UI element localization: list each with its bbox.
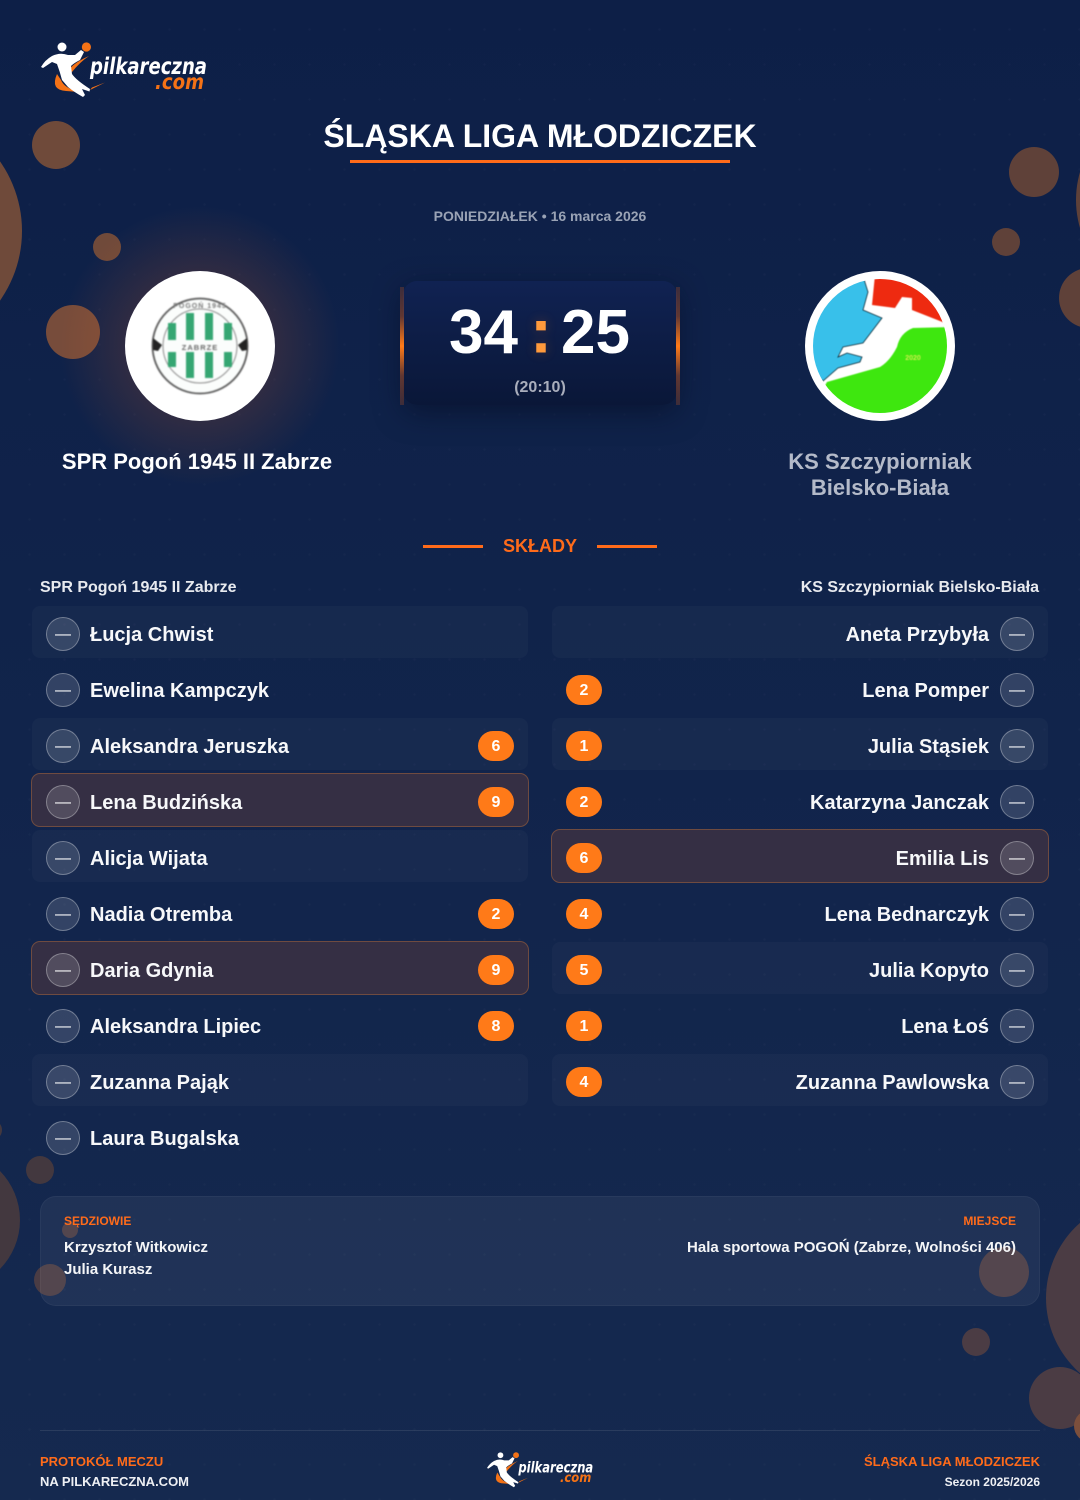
protocol source: NA PILKARECZNA.COM [40,1474,189,1489]
player row: — [1009,626,1025,643]
player row: — [55,1130,71,1147]
match date: PONIEDZIAŁEK • 16 marca 2026 [434,208,646,224]
player row: Aleksandra Lipiec [90,1016,261,1038]
player row: — [1009,738,1025,755]
logo: pilkareczna.com footer [487,1452,593,1488]
season: Sezon 2025/2026 [945,1475,1040,1489]
score colon: : [531,298,551,365]
panel: home squad [31,617,529,1155]
team name: home: SPR Pogoń 1945 II Zabrze [62,449,332,474]
team crest: SPR Pogoń [125,271,275,421]
player row: Łucja Chwist [90,624,213,646]
player row: — [55,682,71,699]
team crest: SPR Pogoń: POGOŃ 1945 [173,301,227,310]
player row [566,897,1034,931]
logo: pilkareczna.com footer: pilkareczna [518,1459,593,1476]
player row: 5 [580,962,588,979]
score background [403,281,677,405]
player row [46,897,514,931]
referees names [64,1239,208,1278]
player row: Alicja Wijata [90,848,208,870]
player row [566,1009,1034,1043]
home score: 34 [449,298,518,367]
player row: — [55,626,71,643]
player row: Lena Bednarczyk [824,904,989,926]
heading line right [597,545,657,548]
player row: — [1009,794,1025,811]
panel: away squad [551,617,1049,1099]
player row: top scorer: Lena Budzińska [90,792,242,814]
player row [552,942,1048,994]
away score: 25 [561,298,630,367]
player row [32,830,528,882]
player row: — [55,738,71,755]
half-time score: (20:10) [514,379,566,396]
player row: 8 [492,1018,500,1035]
player row [566,673,1034,707]
panel: score [398,281,682,418]
player row [552,718,1048,770]
player row: top scorer: — [55,962,71,979]
league label: ŚLĄSKA LIGA MŁODZICZEK [864,1454,1040,1469]
player row [32,718,528,770]
logo: pilkareczna.com header: pilkareczna [89,54,207,80]
player row: — [1009,682,1025,699]
player row: top scorer: Emilia Lis [896,848,989,870]
player row: Aneta Przybyła [846,624,989,646]
player row: 6 [492,738,500,755]
player row: — [1009,1018,1025,1035]
player row [566,785,1034,819]
logo: pilkareczna.com header [41,42,207,97]
player row: — [55,1018,71,1035]
footer divider [40,1430,1040,1431]
player row: 2 [580,682,588,699]
player row: — [55,850,71,867]
venue name: Hala sportowa POGOŃ (Zabrze, Wolności 406) [687,1239,1016,1256]
heading label: SKŁADY [503,536,577,556]
squad header: home: SPR Pogoń 1945 II Zabrze [40,579,236,596]
player row: 2 [492,906,500,923]
player row: Julia Stąsiek [868,736,989,758]
glow behind home logo [60,206,340,486]
player row: top scorer: 9 [492,962,500,979]
footer right text [864,1454,1040,1489]
player row: Aleksandra Jeruszka [90,736,289,758]
title: ŚLĄSKA LIGA MŁODZICZEK [323,118,757,154]
player row: 1 [580,738,588,755]
logo: pilkareczna.com header: .com [155,70,204,94]
venue label: MIEJSCE [963,1214,1016,1228]
panel: match info [40,1196,1040,1306]
player row: — [1009,962,1025,979]
player row [46,673,269,707]
player row [552,1054,1048,1106]
player row: — [1009,1074,1025,1091]
player row: — [1009,906,1025,923]
player row: 2 [580,794,588,811]
player row: Nadia Otremba [90,904,232,926]
player row: top scorer: — [55,794,71,811]
player row: Katarzyna Janczak [810,792,989,814]
player row [552,606,1048,658]
player row [32,1054,528,1106]
player row: Ewelina Kampczyk [90,680,269,702]
player row [46,1009,514,1043]
left accent bar [400,287,404,405]
player row: — [55,906,71,923]
team crest: SPR Pogoń: ZABRZE [182,343,218,352]
team crest: KS Szczypiorniak: 2020 [905,355,921,362]
player row: Lena Pomper [862,680,989,702]
team crest: KS Szczypiorniak [805,271,955,421]
player row: top scorer: — [1009,850,1025,867]
referees label: SĘDZIOWIE [64,1214,131,1228]
player row: top scorer [552,830,1048,882]
player row: 4 [580,906,588,923]
team name: away [788,449,972,500]
player row: top scorer: 6 [580,850,588,867]
player row: Zuzanna Pająk [90,1072,229,1094]
team name: away: Bielsko-Biała [811,475,949,500]
player row [32,606,528,658]
section heading: squads [423,536,657,556]
player row: Julia Kopyto [869,960,989,982]
player row: Laura Bugalska [90,1128,239,1150]
referees names: Krzysztof Witkowicz [64,1239,208,1256]
player row: top scorer [32,774,528,826]
player row: top scorer [32,942,528,994]
player row: Lena Łoś [901,1016,989,1038]
player row: Zuzanna Pawlowska [796,1072,989,1094]
player row [46,1121,240,1155]
squad header: away: KS Szczypiorniak Bielsko-Biała [801,579,1039,596]
logo: pilkareczna.com footer: .com [560,1471,591,1486]
footer left text [40,1454,189,1489]
team name: away: KS Szczypiorniak [788,449,972,474]
player row: 4 [580,1074,588,1091]
title underline [350,160,730,163]
protocol label: PROTOKÓŁ MECZU [40,1454,163,1469]
player row: top scorer: 9 [492,794,500,811]
heading line left [423,545,483,548]
player row: top scorer: Daria Gdynia [90,960,213,982]
right accent bar [676,287,680,405]
referees names: Julia Kurasz [64,1261,152,1278]
player row: 1 [580,1018,588,1035]
player row: — [55,1074,71,1091]
